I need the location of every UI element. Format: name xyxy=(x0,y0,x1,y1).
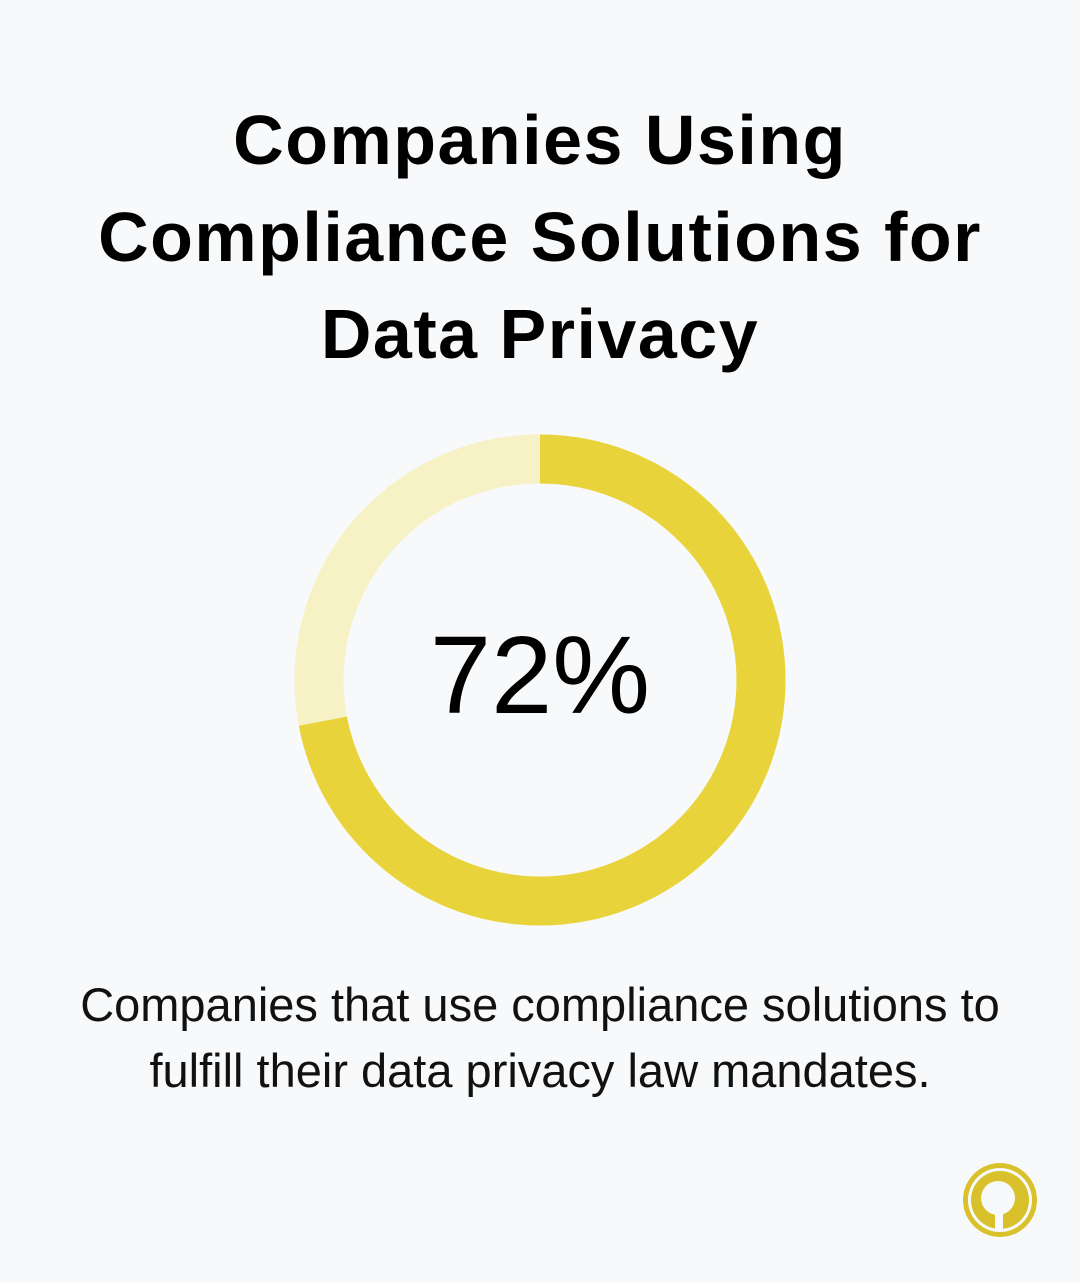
caption: fulfill their data privacy law mandates. xyxy=(149,1044,931,1097)
icon: logo xyxy=(963,1163,1037,1237)
donut chart: 72% xyxy=(430,614,650,737)
title: Compliance Solutions for xyxy=(98,198,982,276)
caption: Companies that use compliance solutions to xyxy=(80,978,1000,1031)
title xyxy=(98,101,982,373)
title: Companies Using xyxy=(233,101,847,179)
caption xyxy=(80,978,1000,1097)
title: Data Privacy xyxy=(321,295,759,373)
